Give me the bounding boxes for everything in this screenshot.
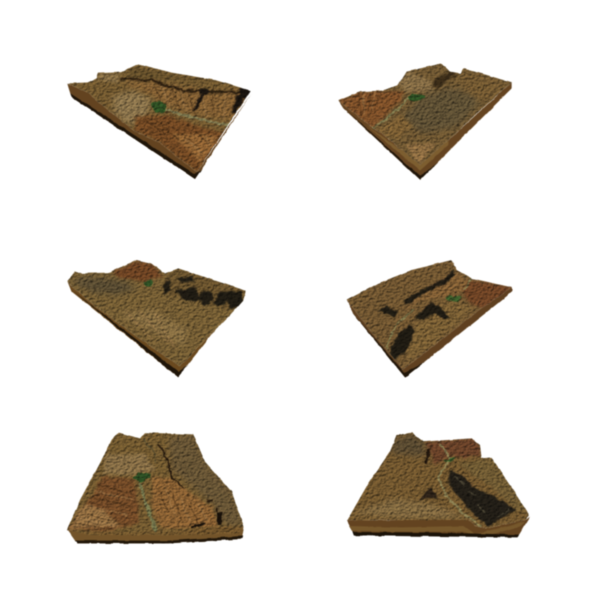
cliff marks: [432, 72, 457, 88]
green field: [445, 295, 462, 302]
river: [165, 109, 232, 126]
top surface: [338, 62, 512, 166]
top surface: [66, 259, 246, 367]
relief shading: [68, 64, 250, 172]
gullies: [358, 92, 392, 117]
block side strata: [347, 287, 512, 377]
terrain block: top left view: [66, 64, 252, 180]
green field: [443, 458, 456, 463]
relief shading: [348, 432, 530, 528]
top surface: [347, 432, 530, 529]
river: [438, 443, 482, 527]
dark canyon wall: [448, 470, 517, 527]
relief shading: [66, 432, 244, 536]
terrain block: bottom right view: [346, 432, 530, 539]
block side strata: [67, 281, 246, 377]
green field: [151, 101, 167, 112]
block side strata: [67, 83, 252, 179]
river: [140, 483, 157, 532]
terrain block: top right view: [338, 62, 512, 180]
top surface: [67, 64, 252, 172]
relief shading: [346, 260, 511, 370]
block side strata: [347, 517, 530, 537]
terrain block: middle left view: [66, 259, 246, 378]
terrain block: middle right view: [346, 260, 514, 378]
terrain block: bottom left view: [66, 432, 244, 545]
river: [372, 98, 408, 129]
cliff line: [120, 79, 250, 93]
block side strata: [338, 82, 512, 180]
green field: [132, 473, 152, 483]
green field: [143, 281, 153, 287]
dark cliff shadows: [163, 276, 242, 309]
gullies: [125, 310, 175, 350]
dark cliffs: [377, 268, 455, 360]
relief shading: [338, 64, 512, 165]
block side strata: [67, 527, 244, 543]
river: [387, 278, 472, 348]
gullies: [75, 485, 198, 528]
cliff marks: [158, 443, 222, 523]
top surface: [66, 432, 244, 536]
top surface: [346, 260, 512, 370]
dark cliff shadows: [192, 88, 251, 113]
gullies: [145, 83, 215, 147]
relief shading: [68, 260, 246, 366]
green field: [407, 94, 424, 101]
